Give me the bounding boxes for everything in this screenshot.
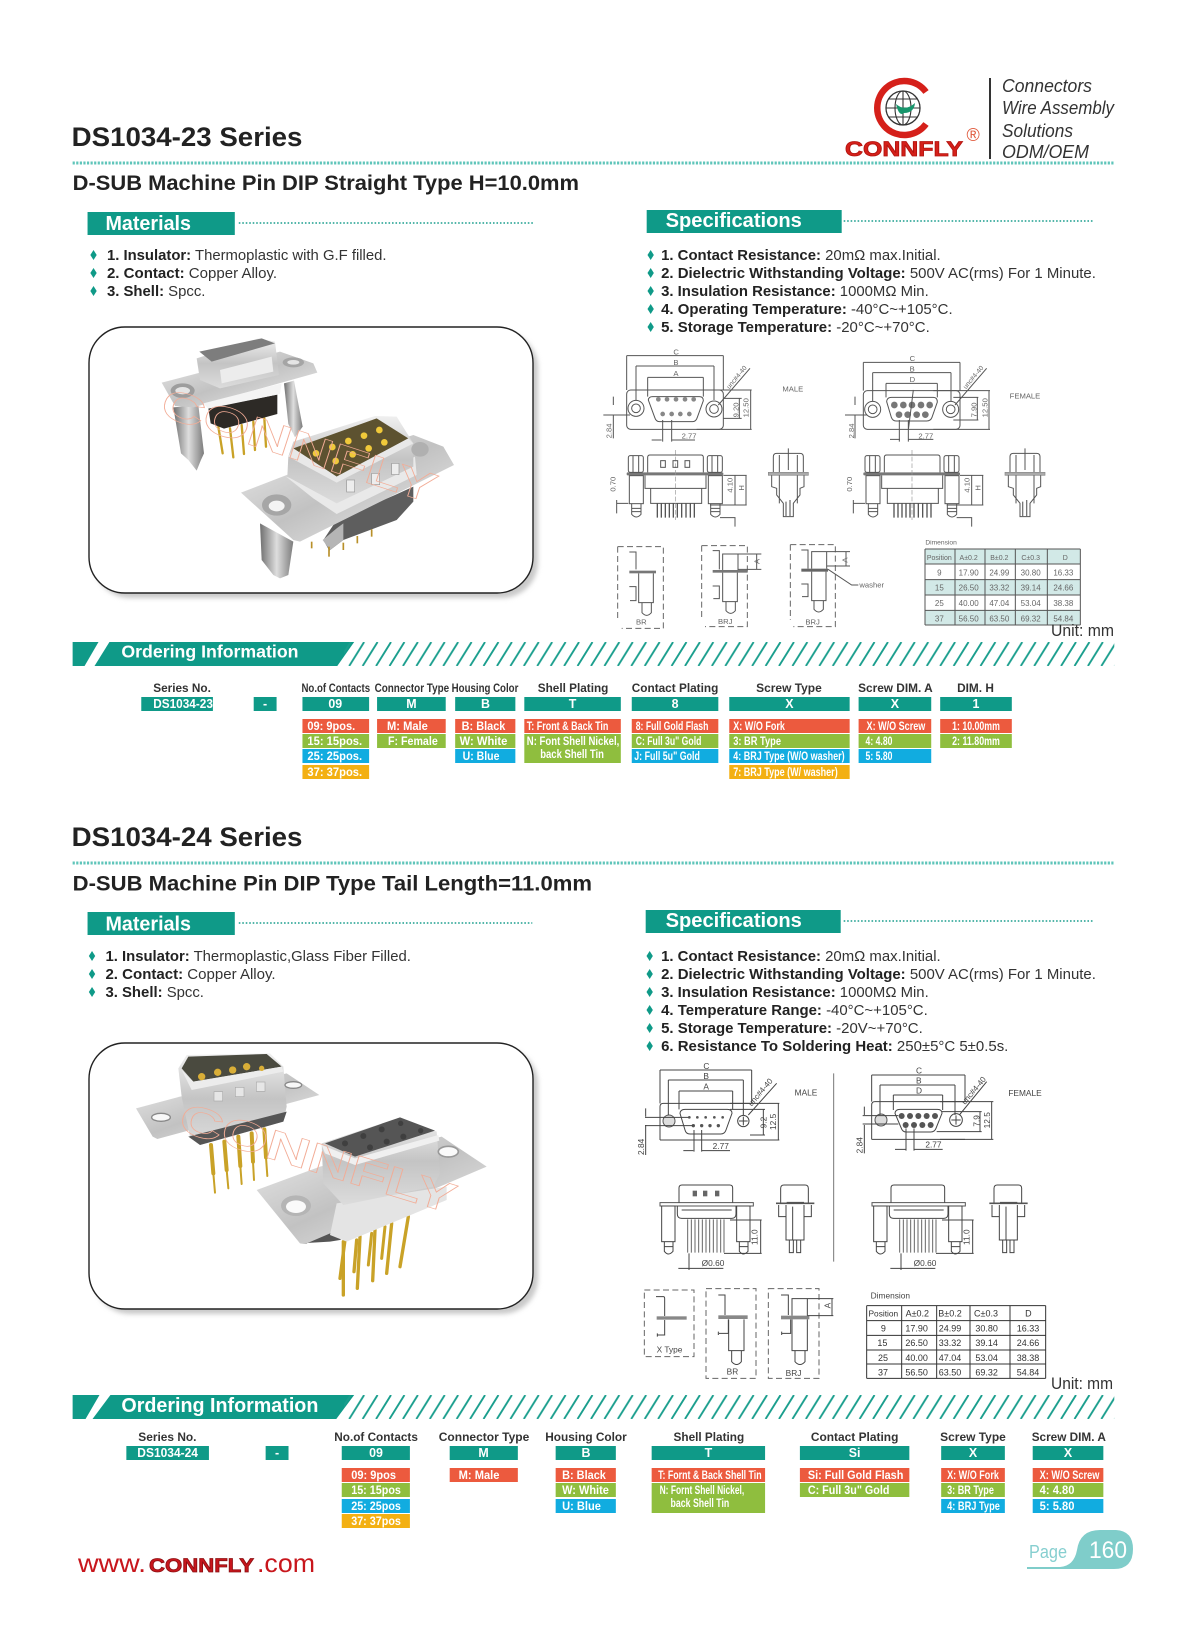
table: dimensions: 24.66 [1053, 584, 1074, 593]
registered mark: ® [966, 125, 980, 145]
tagline: Solutions [1002, 121, 1073, 141]
watermark: CONNFLY [174, 1094, 462, 1223]
drawing: BR screw detail: BR [636, 618, 647, 627]
table: dimensions: 16.33 [1053, 568, 1074, 577]
column: screw dimension A [1032, 1430, 1106, 1513]
column: contact plating: 8: Full Gold Flash [636, 721, 708, 733]
drawing: male end view [776, 1185, 814, 1253]
panel: technical drawings DS1034-24 [636, 1061, 1046, 1378]
footer website: .com [257, 1548, 315, 1578]
materials list: 1. Insulator: Thermoplastic,Glass Fiber Filled. [105, 949, 411, 965]
drawing: male top view: B [673, 358, 678, 367]
column: contact plating: C: Full 3u" Gold [808, 1485, 889, 1497]
table: dimensions [925, 540, 1080, 625]
column: housing color [545, 1430, 627, 1513]
table: dimensions [867, 1291, 1046, 1378]
table: dimensions: 16.33 [1017, 1323, 1039, 1333]
dotted header rule [73, 162, 1114, 164]
column: series number: DS1034-23 [153, 697, 213, 711]
column: housing color: U: Blue [463, 751, 499, 763]
column: screw dimension A: X [891, 697, 900, 711]
panel: specifications heading: Specifications [666, 210, 802, 232]
drawing: male top view: C [703, 1061, 709, 1071]
panel: specifications heading [646, 910, 1094, 933]
drawing: X type detail: X Type [657, 1345, 683, 1355]
drawing: female top view: unc#4-40 [962, 365, 986, 391]
drawing: female top view [854, 1065, 1042, 1153]
column: shell plating: N: Font Shell Nickel, [527, 736, 619, 748]
table: dimensions: 26.50 [959, 584, 979, 593]
materials list: 1. Insulator: Thermoplastic with G.F filled. [107, 248, 387, 264]
table: dimensions: 24.99 [939, 1323, 961, 1333]
column: dimension H: 2: 11.80mm [952, 736, 1000, 748]
table: dimensions: 39.14 [1021, 584, 1041, 593]
table: dimensions: 40.00 [959, 599, 979, 608]
logo block [845, 76, 1115, 162]
table: dimensions: 56.50 [905, 1368, 928, 1378]
column: shell plating: N: Fornt Shell Nickel, [660, 1485, 744, 1497]
column: number of contacts: 09 [369, 1446, 383, 1460]
drawing: female top view: C [916, 1065, 922, 1075]
drawing: male top view: unc#4-40 [746, 1076, 775, 1108]
table: dimensions: A±0.2 [906, 1309, 929, 1319]
drawing: BRJ with washer detail: washer [858, 580, 884, 589]
drawing: male top view: 2.84 [605, 423, 614, 438]
column: contact plating: C: Full 3u" Gold [636, 736, 701, 748]
page number badge [1027, 1530, 1133, 1569]
column: screw dimension A [858, 681, 933, 763]
drawing: female top view: FEMALE [1010, 392, 1040, 401]
table: dimensions: 37 [935, 614, 944, 623]
column: screw dimension A: 4: 4.80 [1040, 1485, 1074, 1497]
table: dimensions: 15 [935, 584, 944, 593]
table: dimensions: 38.38 [1053, 599, 1074, 608]
specifications list: 5. Storage Temperature: -20V~+70°C. [661, 1021, 923, 1037]
footer website: CONNFLY [149, 1555, 254, 1577]
drawing: male top view: A [703, 1081, 709, 1091]
column: contact plating [800, 1430, 909, 1497]
column: contact plating [632, 681, 718, 763]
table: dimensions: D [1063, 555, 1068, 562]
drawing: female top view: 2.77 [918, 431, 933, 440]
column: contact plating: Contact Plating [632, 681, 718, 695]
drawing: male top view: C [673, 348, 679, 357]
panel: product photo frame [89, 327, 538, 598]
column: shell plating: Shell Plating [674, 1430, 744, 1444]
drawing: male top view: unc#4-40 [726, 365, 749, 391]
column: housing color: B [582, 1446, 590, 1460]
materials list: 2. Contact: Copper Alloy. [107, 266, 277, 282]
specifications list: 4. Temperature Range: -40°C~+105°C. [661, 1003, 928, 1019]
column: screw dimension A: Screw DIM. A [1032, 1430, 1106, 1444]
drawing: male top view: A [673, 369, 679, 378]
specifications list [646, 949, 1096, 1055]
ordering table [141, 681, 1012, 779]
drawing: female top view: 7.9 [971, 1115, 981, 1127]
drawing: male top view: 2.77 [682, 432, 697, 441]
column: number of contacts [301, 681, 370, 779]
column: dimension H [940, 681, 1012, 748]
column: dimension H: 1: 10.00mm [952, 721, 1000, 733]
column: housing color [452, 681, 519, 763]
column: screw type: 4: BRJ Type [947, 1501, 1000, 1513]
page number badge: Page [1029, 1542, 1067, 1562]
photo: D-sub connectors straight type [156, 338, 454, 578]
materials list [90, 248, 387, 300]
drawing: BR detail [706, 1289, 756, 1378]
column: screw type: X: W/O Fork [733, 721, 785, 733]
logo: Connfly globe [877, 81, 926, 135]
panel: technical drawings DS1034-23 [603, 348, 1080, 628]
column: screw dimension A: 5: 5.80 [866, 751, 892, 763]
table: dimensions: 47.04 [939, 1353, 961, 1363]
column: shell plating [652, 1430, 765, 1513]
column: shell plating: back Shell Tin [540, 749, 604, 761]
drawing: female top view [845, 354, 1040, 442]
footer website: www. [77, 1548, 146, 1578]
column: connector type: F: Female [388, 736, 438, 748]
drawing: female top view: B [910, 365, 915, 374]
column: contact plating: Si [849, 1446, 860, 1460]
specifications list: 2. Dielectric Withstanding Voltage: 500V AC(rms) For 1 Minute. [661, 967, 1096, 983]
subtitle: D-SUB Machine Pin DIP Type Tail Length=11.0mm [73, 871, 592, 896]
table: dimensions: 9 [881, 1323, 886, 1333]
column: number of contacts [334, 1430, 418, 1528]
drawing: female top view: unc#4-40 [960, 1075, 988, 1106]
column: screw type [729, 681, 850, 779]
column: screw type: Screw Type [940, 1430, 1006, 1444]
drawing: male top view: 12.5 [768, 1113, 778, 1130]
unit note: Unit: mm [1051, 621, 1114, 640]
ordering banner: Ordering Information [121, 1395, 318, 1417]
specifications list: 2. Dielectric Withstanding Voltage: 500V AC(rms) For 1 Minute. [661, 266, 1096, 282]
column: series number [126, 1430, 209, 1460]
table: dimensions: Position [927, 555, 952, 562]
table: dimensions: 30.80 [1021, 568, 1041, 577]
column: connector type [375, 681, 449, 748]
drawing: BRJ detail [768, 1289, 833, 1378]
column: connector type: Connector Type [439, 1430, 530, 1444]
watermark: CONNFLY [156, 379, 443, 512]
column: housing color: Housing Color [452, 681, 519, 695]
dash box: - [275, 1446, 279, 1460]
drawing: BR screw detail [618, 547, 663, 628]
column: connector type: M: Male [459, 1470, 499, 1482]
column: shell plating: T [705, 1446, 713, 1460]
dash box [266, 1446, 289, 1460]
drawing: male top view: 9.20 [731, 402, 740, 417]
drawing: female top view: 7.90 [970, 402, 979, 417]
table: dimensions: 33.32 [989, 584, 1010, 593]
ordering banner [73, 1395, 1114, 1419]
column: dimension H: 1 [973, 697, 980, 711]
column: shell plating: T: Front & Back Tin [527, 721, 608, 733]
column: screw type: X [785, 697, 794, 711]
drawing: female top view: FEMALE [1008, 1088, 1042, 1098]
table: dimensions: B±0.2 [990, 555, 1009, 562]
column: number of contacts: 37: 37pos [351, 1516, 401, 1528]
drawing: male top view [636, 1061, 818, 1155]
drawing: female top view: 12.50 [980, 398, 989, 417]
panel: product photo frame [89, 1043, 538, 1314]
table: dimensions: C±0.3 [974, 1309, 998, 1319]
table: dimensions: Position [869, 1309, 899, 1319]
column: housing color: B [481, 697, 490, 711]
ordering table [126, 1430, 1106, 1528]
table: dimensions: 30.80 [975, 1323, 998, 1333]
drawing: female top view: 12.5 [982, 1112, 992, 1128]
column: screw type: 3: BR Type [733, 736, 781, 748]
column: screw type: 3: BR Type [947, 1485, 994, 1497]
tagline [1002, 76, 1115, 162]
drawing: female top view: 2.77 [925, 1139, 942, 1149]
specifications list: 1. Contact Resistance: 20mΩ max.Initial. [661, 248, 941, 264]
materials list: 3. Shell: Spcc. [107, 284, 205, 300]
panel: materials heading [88, 912, 532, 936]
table: dimensions: 15 [877, 1338, 887, 1348]
table: dimensions: 33.32 [939, 1338, 961, 1348]
table: dimensions: A±0.2 [960, 555, 978, 562]
section: DS1034-24 series [72, 822, 1114, 1528]
column: housing color: W: White [562, 1485, 609, 1497]
table: dimensions: 17.90 [905, 1323, 928, 1333]
specifications list: 4. Operating Temperature: -40°C~+105°C. [661, 302, 953, 318]
drawing: female top view: C [910, 354, 916, 363]
column: connector type: M [478, 1446, 489, 1460]
column: number of contacts: 25: 25pos [351, 1501, 401, 1513]
column: contact plating: 8 [672, 697, 679, 711]
tagline: ODM/OEM [1002, 142, 1089, 162]
column: series number: Series No. [138, 1430, 196, 1444]
column: series number [141, 681, 213, 711]
drawing: female top view: D [916, 1085, 922, 1095]
table: dimensions: 37 [878, 1368, 888, 1378]
footer website [77, 1548, 315, 1578]
drawing: BRJ with washer detail [790, 545, 884, 627]
column: dimension H: DIM. H [957, 681, 994, 695]
divider [989, 78, 991, 159]
materials list: 2. Contact: Copper Alloy. [105, 967, 276, 983]
materials list [89, 949, 411, 1001]
column: number of contacts: No.of Contacts [334, 1430, 418, 1444]
drawing: male top view: 9.2 [759, 1116, 769, 1128]
column: contact plating: Si: Full Gold Flash [808, 1470, 903, 1482]
panel: specifications heading [647, 210, 1094, 233]
series title: DS1034-24 Series [72, 822, 302, 852]
column: number of contacts: 15: 15pos [351, 1485, 401, 1497]
drawing: male top view: MALE [782, 385, 803, 394]
drawing: female end view [989, 1185, 1028, 1253]
table: dimensions: 38.38 [1017, 1353, 1039, 1363]
table: dimensions: 47.04 [989, 599, 1010, 608]
drawing: male top view: 2.84 [636, 1138, 646, 1155]
drawing: BRJ screw detail [702, 546, 761, 627]
table: dimensions: Dimension [925, 540, 957, 547]
column: contact plating: Contact Plating [811, 1430, 898, 1444]
ordering banner: Ordering Information [121, 641, 298, 662]
specifications list: 1. Contact Resistance: 20mΩ max.Initial. [661, 949, 941, 965]
column: screw type [940, 1430, 1006, 1513]
column: series number: DS1034-24 [137, 1446, 198, 1460]
column: screw dimension A: X: W/O Screw [867, 721, 925, 733]
dotted header rule [73, 862, 1114, 864]
column: housing color: B: Black [462, 721, 506, 733]
column: shell plating: T: Fornt & Back Shell Tin [658, 1470, 762, 1482]
table: dimensions: 9 [937, 568, 942, 577]
column: screw dimension A: X [1064, 1446, 1073, 1460]
panel: materials heading [88, 212, 533, 235]
drawing: female end view [1005, 448, 1045, 517]
page number badge: 160 [1089, 1537, 1127, 1564]
drawing: male side view [608, 450, 747, 527]
table: dimensions: 25 [878, 1353, 888, 1363]
column: contact plating: J: Full 5u" Gold [634, 751, 700, 763]
table: dimensions: 69.32 [975, 1368, 998, 1378]
column: housing color: W: White [460, 736, 507, 748]
column: screw type: X [969, 1446, 978, 1460]
table: dimensions: 54.84 [1017, 1368, 1039, 1378]
table: dimensions: 24.66 [1017, 1338, 1039, 1348]
drawing: male end view [768, 448, 808, 517]
table: dimensions: 17.90 [959, 568, 979, 577]
drawing: male top view: 2.77 [713, 1141, 729, 1151]
column: screw type: X: W/O Fork [947, 1470, 999, 1482]
table: dimensions: 63.50 [939, 1368, 961, 1378]
table: dimensions: C±0.3 [1021, 555, 1040, 562]
drawing: X type detail [644, 1290, 694, 1357]
column: series number: Series No. [153, 681, 211, 695]
table: dimensions: 69.32 [1021, 614, 1041, 623]
drawing: BR detail: BR [727, 1367, 738, 1377]
tagline: Connectors [1002, 76, 1092, 96]
column: screw type: 4: BRJ Type (W/O washer) [733, 751, 845, 763]
unit note: Unit: mm [1051, 1374, 1113, 1393]
column: connector type: M: Male [387, 721, 428, 733]
drawing: female top view: B [916, 1075, 922, 1085]
column: housing color: B: Black [562, 1470, 606, 1482]
column: shell plating: T [569, 697, 577, 711]
table: dimensions: 53.04 [1021, 599, 1041, 608]
table: dimensions: 56.50 [959, 614, 979, 623]
table: dimensions: 25 [935, 599, 944, 608]
drawing: BRJ detail: BRJ [786, 1368, 801, 1378]
drawing: female top view: 2.84 [854, 1137, 864, 1153]
table: dimensions: 63.50 [989, 614, 1010, 623]
column: number of contacts: 09 [328, 697, 342, 711]
column: screw dimension A: 4: 4.80 [866, 736, 892, 748]
column: number of contacts: 25: 25pos. [307, 751, 362, 763]
panel: specifications heading: Specifications [666, 910, 802, 932]
ordering banner [73, 641, 1114, 666]
drawing: BRJ with washer detail: BRJ [805, 617, 820, 626]
column: connector type: Connector Type [375, 681, 449, 695]
subtitle: D-SUB Machine Pin DIP Straight Type H=10.0mm [73, 171, 579, 195]
column: shell plating: Shell Plating [538, 681, 608, 695]
table: dimensions: 26.50 [905, 1338, 928, 1348]
column: connector type [439, 1430, 530, 1482]
table: dimensions: 40.00 [905, 1353, 928, 1363]
column: screw dimension A: Screw DIM. A [858, 681, 933, 695]
drawing: female top view: D [910, 375, 916, 384]
section: DS1034-23 series [72, 122, 1114, 779]
drawing: female side view [845, 450, 983, 527]
column: connector type: M [406, 697, 417, 711]
column: shell plating: back Shell Tin [671, 1498, 729, 1510]
specifications list: 6. Resistance To Soldering Heat: 250±5°C 5±0.5s. [661, 1039, 1008, 1055]
materials list: 3. Shell: Spcc. [105, 985, 204, 1001]
column: number of contacts: 37: 37pos. [307, 767, 362, 779]
column: screw dimension A: X: W/O Screw [1040, 1470, 1099, 1482]
drawing: male top view: B [703, 1071, 709, 1081]
logo wordmark: CONNFLY [845, 138, 963, 161]
drawing: BRJ screw detail: BRJ [718, 617, 733, 626]
drawing: divider [832, 1073, 835, 1262]
table: dimensions: 54.84 [1053, 614, 1074, 623]
drawing: male side view [660, 1185, 762, 1270]
photo: D-sub connectors tail length type [136, 1053, 487, 1295]
table: dimensions: 53.04 [975, 1353, 998, 1363]
table: dimensions: 24.99 [989, 568, 1010, 577]
column: shell plating [524, 681, 621, 763]
table: dimensions: D [1025, 1309, 1032, 1319]
table: dimensions: B±0.2 [938, 1309, 962, 1319]
drawing: male top view: MALE [795, 1088, 818, 1098]
series title: DS1034-23 Series [72, 122, 302, 152]
drawing: female side view [872, 1185, 974, 1270]
column: screw type: Screw Type [756, 681, 822, 695]
column: screw type: 7: BRJ Type (W/ washer) [733, 767, 838, 779]
drawing: BRJ detail: A [823, 1302, 833, 1308]
specifications list: 5. Storage Temperature: -20°C~+70°C. [661, 320, 930, 336]
column: screw dimension A: 5: 5.80 [1040, 1501, 1074, 1513]
specifications list: 3. Insulation Resistance: 1000MΩ Min. [661, 284, 929, 300]
drawing: male top view [603, 348, 803, 442]
column: housing color: Housing Color [545, 1430, 627, 1444]
drawing: male top view: 12.50 [741, 398, 750, 417]
table: dimensions: Dimension [871, 1291, 910, 1301]
specifications list: 3. Insulation Resistance: 1000MΩ Min. [661, 985, 929, 1001]
drawing: BRJ screw detail: A [752, 558, 761, 564]
dash box [254, 697, 277, 711]
dash box: - [263, 697, 267, 711]
table: dimensions: 39.14 [975, 1338, 998, 1348]
specifications list [647, 248, 1096, 336]
drawing: BRJ with washer detail: A [840, 557, 849, 563]
column: number of contacts: 09: 9pos [351, 1470, 396, 1482]
panel: materials heading: Materials [105, 213, 191, 235]
column: number of contacts: 09: 9pos. [307, 721, 355, 733]
column: number of contacts: 15: 15pos. [307, 736, 362, 748]
panel: materials heading: Materials [105, 913, 191, 936]
column: number of contacts: No.of Contacts [301, 681, 370, 695]
tagline: Wire Assembly [1002, 98, 1115, 118]
column: housing color: U: Blue [562, 1501, 601, 1513]
drawing: female top view: 2.84 [847, 423, 856, 438]
